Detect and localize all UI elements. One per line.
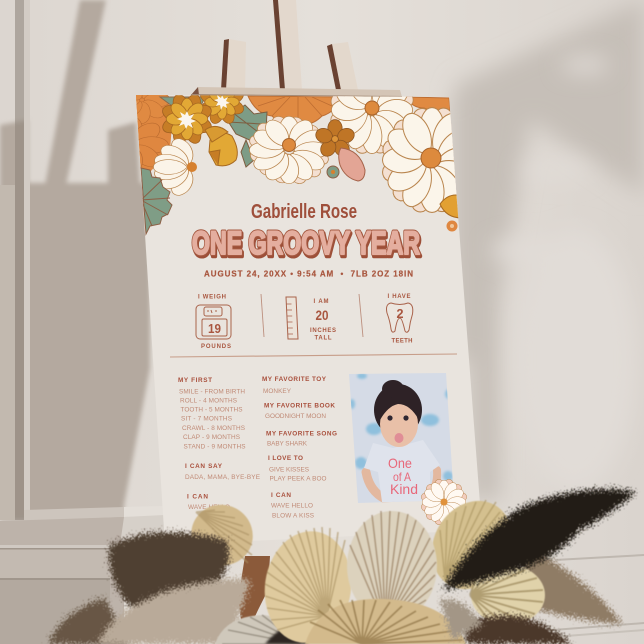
stat: teeth <box>386 294 413 344</box>
column: milestones <box>178 377 260 511</box>
blanket dots <box>349 373 453 481</box>
daisy top back petals <box>330 96 414 154</box>
number: 19: 19 <box>208 321 221 336</box>
arms <box>366 470 437 501</box>
text: monkey: MONKEY <box>263 388 292 395</box>
palm fan: grey bottom <box>215 615 305 644</box>
list: firsts: CLAP - 9 MONTHS <box>183 434 240 441</box>
palm fan: right upper <box>416 486 528 604</box>
shirt lettering <box>388 455 418 497</box>
column: favorites <box>262 376 337 520</box>
palm fan: center right <box>347 511 437 625</box>
yellow flower right <box>204 95 240 120</box>
baseboard left <box>0 545 118 644</box>
icon: scale <box>196 305 231 339</box>
text: words: DADA, MAMA, BYE-BYE <box>185 474 260 481</box>
text: wave hello: WAVE HELLO <box>271 502 313 510</box>
shirt lettering: Kind <box>390 481 418 497</box>
mouth and tongue <box>394 433 404 443</box>
pampas: grey middle right <box>440 600 482 640</box>
icon: tooth <box>386 303 413 332</box>
orange flower top center <box>248 96 340 124</box>
number: 20: 20 <box>316 307 329 323</box>
main title <box>192 225 421 263</box>
yellow flower back <box>200 95 244 124</box>
daisy left half <box>153 138 194 196</box>
yellow flower right edge <box>440 195 462 218</box>
heading: favorite song: MY FAVORITE SONG <box>266 430 337 438</box>
text: wave hello: WAVE HELLO <box>188 504 230 511</box>
icon: ruler <box>286 297 298 339</box>
small green flower <box>327 166 339 178</box>
pampas: right brown plume <box>522 548 622 624</box>
label: I have: I HAVE <box>388 294 410 300</box>
heading: favorite book: MY FAVORITE BOOK <box>264 402 335 410</box>
daisy right <box>382 107 458 213</box>
baseboard right <box>540 554 644 639</box>
horizontal rule <box>170 354 457 357</box>
stat: height <box>286 297 336 342</box>
heading: I love to: I LOVE TO <box>268 455 303 462</box>
number: 2: 2 <box>396 306 404 321</box>
orange flower top right <box>406 97 450 112</box>
eyes <box>387 415 409 421</box>
green leaf center <box>226 105 267 167</box>
poster board <box>136 95 480 533</box>
dried floral arrangement <box>48 486 636 644</box>
text: goodnight moon: GOODNIGHT MOON <box>265 413 326 420</box>
pampas: dark brown lower left <box>48 598 130 644</box>
wall panel molding left <box>0 0 165 644</box>
yellow flower main <box>166 98 208 140</box>
list: firsts: SMILE - FROM BIRTH <box>179 388 245 396</box>
label: inches: INCHES <box>310 328 336 334</box>
brown small flower <box>314 120 356 159</box>
divider <box>261 294 264 337</box>
baby photo <box>349 373 453 503</box>
daisy right disc <box>421 148 441 168</box>
shadow: foliage on right wall <box>452 0 644 500</box>
list: firsts: STAND - 9 MONTHS <box>184 444 246 450</box>
label: pounds: POUNDS <box>201 344 231 350</box>
dark tuft bottom <box>265 624 308 644</box>
label: tall: TALL <box>314 336 332 342</box>
text: peek a boo: PLAY PEEK A BOO <box>270 476 327 482</box>
shirt <box>364 440 440 502</box>
small daisy sticker <box>416 474 472 530</box>
palm fan: right lower <box>470 565 545 625</box>
daisy top disc <box>365 101 379 115</box>
heading: I can: I CAN <box>187 494 208 500</box>
main title: ONE GROOVY YEAR <box>192 225 420 261</box>
yellow flower main back <box>162 95 212 144</box>
orange flower left <box>137 118 169 168</box>
text: blow a kiss: BLOW A KISS <box>272 512 314 520</box>
heading: my first: MY FIRST <box>178 377 212 384</box>
daisy left center <box>187 162 197 172</box>
daisy center back petals <box>249 116 329 184</box>
shirt lettering: of A <box>393 470 411 484</box>
easel <box>191 0 402 98</box>
hair <box>374 380 422 428</box>
yellow lump flower <box>205 126 237 166</box>
daisy center <box>249 116 329 184</box>
daisy center disc <box>282 138 296 152</box>
floral header <box>136 95 458 236</box>
label: I am: I AM <box>314 299 328 305</box>
face <box>380 401 418 447</box>
label: I weigh: I WEIGH <box>198 294 226 300</box>
pampas: pale <box>98 579 250 644</box>
text: give kisses: GIVE KISSES <box>269 466 309 474</box>
heading: favorite toy: MY FAVORITE TOY <box>262 376 327 383</box>
birth details: AUGUST 24, 20XX • 9:54 AM • 7LB 2OZ 18IN <box>204 270 413 278</box>
light patches on right wall <box>490 57 637 490</box>
hair fringe <box>380 401 418 420</box>
orange fill corner left <box>136 95 172 172</box>
small orange flower <box>446 220 458 232</box>
divider <box>359 294 363 337</box>
main title: ONE GROOVY YEAR <box>193 227 421 263</box>
palm fan: upper left <box>180 494 264 576</box>
orange flower top left <box>136 95 169 124</box>
pampas: black plume <box>442 489 636 590</box>
white star centers <box>177 95 230 129</box>
pampas: dark brown upper <box>109 532 229 612</box>
daisy top <box>331 96 413 154</box>
list: firsts <box>179 388 246 450</box>
green fan leaf <box>141 168 172 234</box>
text: baby shark: BABY SHARK <box>267 440 308 448</box>
name: Gabrielle Rose <box>251 201 357 223</box>
list: firsts: TOOTH - 5 MONTHS <box>180 406 242 414</box>
palm fan: lower center <box>305 599 466 644</box>
list: firsts: SIT - 7 MONTHS <box>181 416 232 422</box>
list: firsts: CRAWL - 8 MONTHS <box>182 425 245 432</box>
main title: ONE GROOVY YEAR <box>192 225 420 261</box>
palm fan: center left <box>258 526 358 644</box>
pampas: dark lower right <box>466 616 572 644</box>
wood easel leg <box>238 556 270 640</box>
list: firsts: ROLL - 4 MONTHS <box>180 398 237 404</box>
shirt lettering: One <box>388 455 412 471</box>
label: teeth: TEETH <box>392 338 412 344</box>
stat: weight <box>196 294 231 350</box>
green leaf top left <box>158 96 204 106</box>
pink bud <box>339 148 365 181</box>
daisy right back petals <box>382 108 457 212</box>
heading: I can say: I CAN SAY <box>185 463 223 470</box>
heading: I can: I CAN <box>271 492 291 499</box>
shadow: easel and frame on left wall <box>0 0 150 520</box>
